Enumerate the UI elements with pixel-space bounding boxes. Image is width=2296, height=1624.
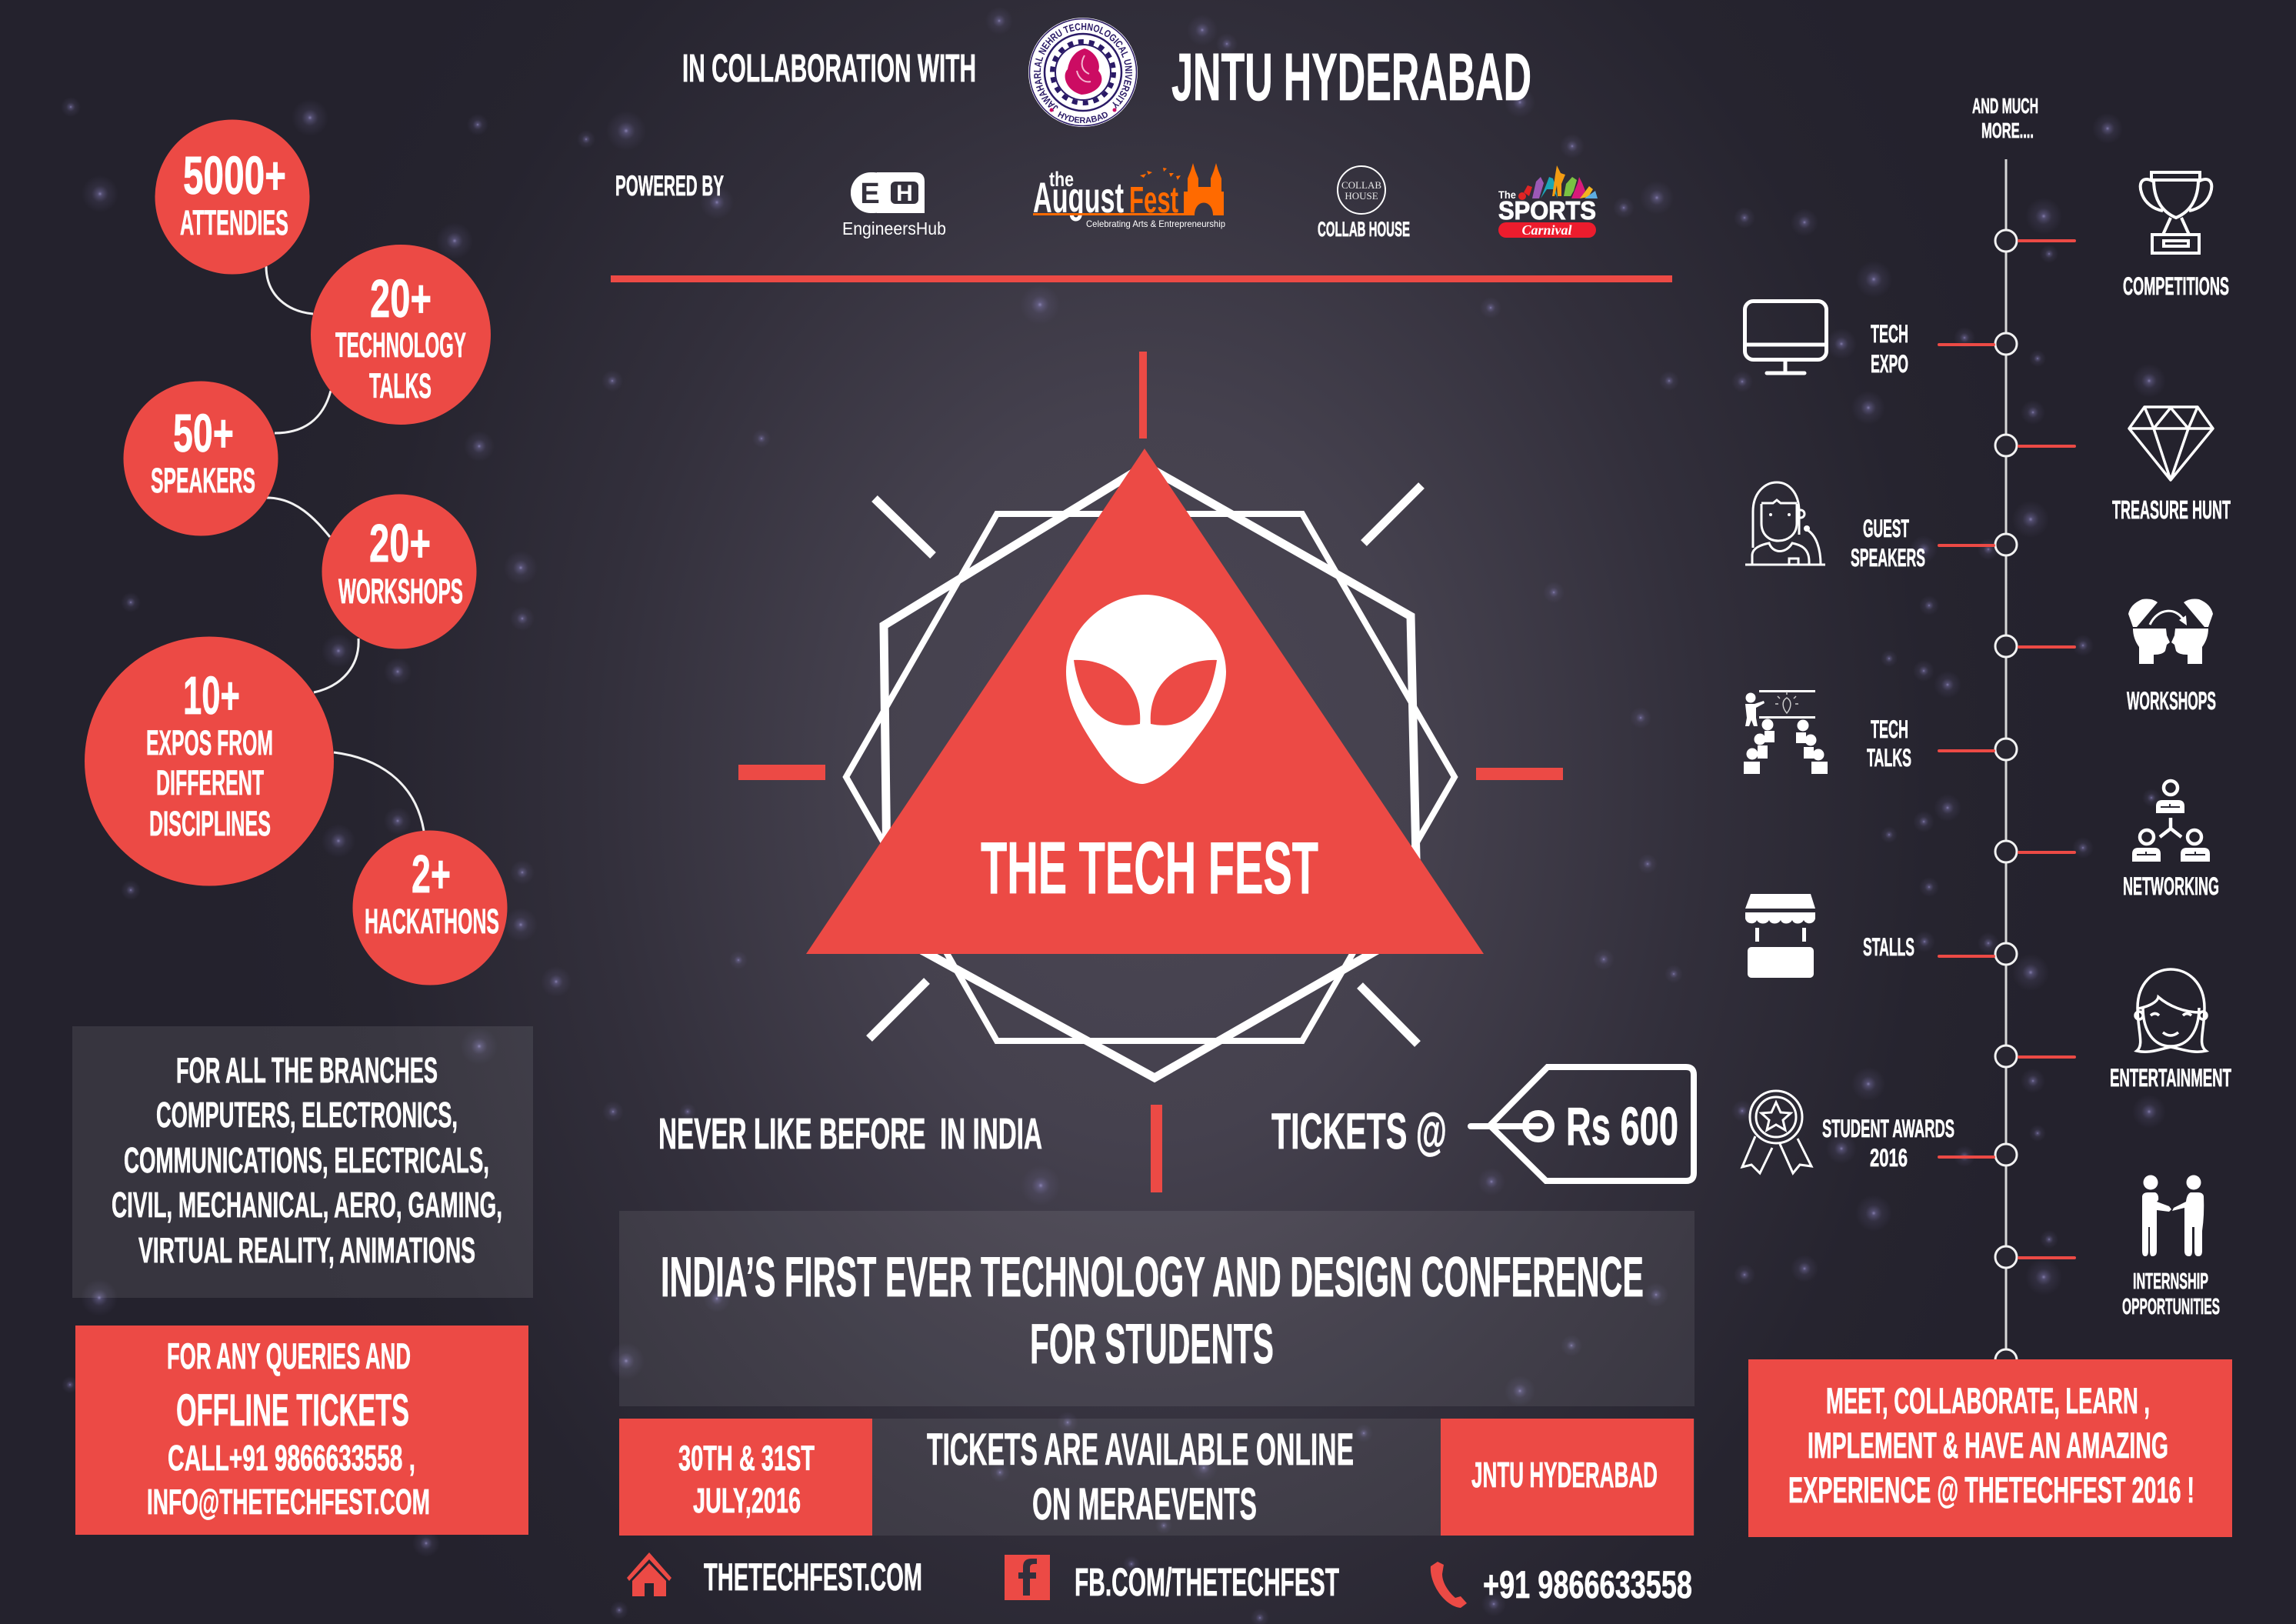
bubble: expos	[85, 637, 334, 886]
bubble: hackathons	[352, 831, 508, 985]
logo: EngineersHub: E	[860, 178, 880, 210]
logo: Collab House: COLLAB	[1341, 179, 1381, 191]
partner name: JNTU HYDERABAD	[1171, 40, 1531, 115]
bubble: attendees	[155, 120, 309, 274]
item: tech expo: TECH	[1871, 320, 1908, 348]
logo: the August Fest: Celebrating Arts & Entrepreneurship	[1086, 218, 1225, 229]
item: workshops: WORKSHOPS	[2127, 687, 2216, 715]
panel: offline tickets: CALL+91 9866633558 ,	[168, 1438, 415, 1478]
bubble: speakers: SPEAKERS	[151, 461, 255, 500]
powered by row	[615, 163, 1598, 241]
timeline nodes	[1995, 230, 2017, 1371]
icon: facebook	[1005, 1555, 1050, 1600]
icon: alien head	[1066, 595, 1226, 784]
logo: the August Fest: Fest	[1129, 180, 1178, 221]
date box: JULY,2016	[693, 1481, 801, 1520]
item: guest speakers: SPEAKERS	[1851, 544, 1925, 572]
phone number: +91 9866633558	[1483, 1563, 1692, 1606]
panel: branches	[72, 1026, 533, 1298]
white burst lines	[869, 485, 1421, 1044]
bubble: technology talks: 20+	[370, 268, 432, 328]
item: guest speakers: GUEST	[1863, 515, 1909, 542]
icon: JNTU university seal: HYDERABAD	[1058, 111, 1108, 123]
item: tech expo: EXPO	[1871, 350, 1908, 378]
panel: offline tickets: FOR ANY QUERIES AND	[167, 1336, 411, 1376]
item: stalls: STALLS	[1863, 933, 1914, 961]
collaboration header	[682, 18, 1531, 127]
panel: conference headline	[619, 1211, 1695, 1406]
logo: The Sports Carnival: The	[1498, 188, 1516, 201]
item: student awards	[1742, 1091, 1954, 1173]
bubble: expos: DISCIPLINES	[149, 804, 271, 843]
panel: branches: COMMUNICATIONS, ELECTRICALS,	[124, 1140, 489, 1180]
item: tech talks: TALKS	[1867, 744, 1911, 772]
timeline heading: AND MUCH	[1972, 94, 2038, 118]
contact row	[627, 1552, 1692, 1608]
item: tech talks	[1744, 690, 1911, 774]
item: tech talks: TECH	[1871, 715, 1908, 743]
octagon frame	[846, 514, 1455, 1041]
item: treasure hunt	[2112, 407, 2231, 524]
logo: EngineersHub	[842, 172, 946, 238]
bubble: technology talks: TALKS	[369, 366, 432, 405]
item: workshops	[2127, 599, 2216, 715]
item: entertainment	[2110, 969, 2231, 1092]
panel: conference headline: FOR STUDENTS	[1030, 1313, 1274, 1376]
timeline	[1742, 94, 2231, 1371]
logo: EngineersHub: H	[896, 181, 913, 206]
timeline heading	[1972, 94, 2038, 142]
bubble: speakers: 50+	[173, 403, 234, 463]
powered by label: POWERED BY	[615, 170, 724, 202]
item: stalls	[1745, 894, 1914, 978]
date box: 30TH & 31ST	[678, 1439, 815, 1478]
logo: The Sports Carnival	[1498, 165, 1598, 238]
panel: branches: COMPUTERS, ELECTRONICS,	[156, 1095, 458, 1135]
panel: offline tickets: OFFLINE TICKETS	[176, 1386, 409, 1436]
connector lines	[266, 266, 424, 831]
timeline heading: MORE....	[1981, 118, 2034, 142]
icon: price tag	[1471, 1067, 1694, 1181]
red connectors	[1939, 241, 2074, 1258]
venue box: JNTU HYDERABAD	[1471, 1455, 1658, 1495]
logo: The Sports Carnival: Carnival	[1521, 222, 1572, 238]
info strip	[619, 1419, 1695, 1536]
bubble: expos: EXPOS FROM	[146, 723, 273, 762]
central emblem	[738, 352, 1563, 1078]
item: student awards: STUDENT AWARDS	[1822, 1115, 1954, 1142]
panel: closing message	[1748, 1359, 2232, 1537]
timeline spine	[2004, 159, 2008, 1362]
panel: branches: CIVIL, MECHANICAL, AERO, GAMING,	[112, 1185, 502, 1225]
bubble: technology talks	[311, 245, 491, 425]
event title: THE TECH FEST	[981, 827, 1318, 909]
item: networking	[2123, 781, 2219, 900]
ticket availability	[619, 1419, 1695, 1536]
ticket availability: ON MERAEVENTS	[1032, 1479, 1257, 1529]
logo: EngineersHub: EngineersHub	[842, 218, 946, 238]
collaboration label: IN COLLABORATION WITH	[682, 46, 976, 90]
red triangle	[806, 449, 1484, 954]
ticket availability: TICKETS ARE AVAILABLE ONLINE	[927, 1425, 1354, 1475]
icon: home	[627, 1552, 671, 1596]
logo: Collab House	[1318, 166, 1410, 241]
date box	[619, 1419, 872, 1536]
logo: Collab House: HOUSE	[1345, 190, 1378, 202]
panel: branches: VIRTUAL REALITY, ANIMATIONS	[138, 1230, 475, 1270]
tickets label: TICKETS @	[1271, 1102, 1447, 1159]
panel: branches: FOR ALL THE BRANCHES	[176, 1050, 438, 1090]
item: networking: NETWORKING	[2123, 872, 2219, 900]
statistic bubbles	[85, 120, 508, 985]
red ticks	[738, 352, 1563, 780]
logo: the August Fest: August	[1033, 173, 1124, 222]
icon: JNTU university seal: JAWAHARLAL NEHRU TECHNOLOGICAL UNIVERSITY	[1034, 23, 1132, 112]
divider tick	[1151, 1105, 1162, 1192]
bubble: expos: 10+	[183, 665, 240, 725]
item: internships: INTERNSHIP	[2133, 1269, 2208, 1294]
website: THETECHFEST.COM	[704, 1556, 922, 1599]
panel: offline tickets	[75, 1326, 528, 1535]
bubble: technology talks: TECHNOLOGY	[335, 325, 466, 365]
hexagon frame	[884, 465, 1418, 1078]
venue box	[1441, 1419, 1694, 1536]
bubble: attendees: ATTENDIES	[180, 203, 288, 242]
header divider	[611, 275, 1672, 282]
facebook address: FB.COM/THETECHFEST	[1075, 1560, 1339, 1604]
item: competitions	[2123, 172, 2229, 300]
item: tech expo	[1744, 302, 1908, 378]
item: student awards: 2016	[1870, 1144, 1908, 1172]
logo: Collab House: COLLAB HOUSE	[1318, 218, 1410, 241]
tagline: NEVER LIKE BEFORE IN INDIA	[658, 1109, 1042, 1159]
bubble: hackathons: HACKATHONS	[365, 902, 499, 941]
logo: The Sports Carnival: SPORTS	[1498, 196, 1596, 225]
bubble: workshops: 20+	[369, 513, 431, 573]
bubble: attendees: 5000+	[183, 145, 286, 205]
item: guest speakers	[1745, 482, 1925, 572]
panel: offline tickets: INFO@THETECHFEST.COM	[147, 1482, 430, 1522]
item: internships	[2122, 1175, 2220, 1319]
bubble: hackathons: 2+	[412, 844, 451, 904]
icon: price tag: Rs 600	[1566, 1096, 1678, 1156]
icon: phone	[1431, 1562, 1467, 1608]
bubble: workshops	[322, 494, 477, 649]
bubble: workshops: WORKSHOPS	[338, 572, 463, 611]
logo: the August Fest	[1033, 163, 1225, 229]
bubble: speakers	[123, 382, 278, 535]
bubble: expos: DIFFERENT	[156, 763, 264, 802]
logo: the August Fest: the	[1049, 168, 1074, 191]
